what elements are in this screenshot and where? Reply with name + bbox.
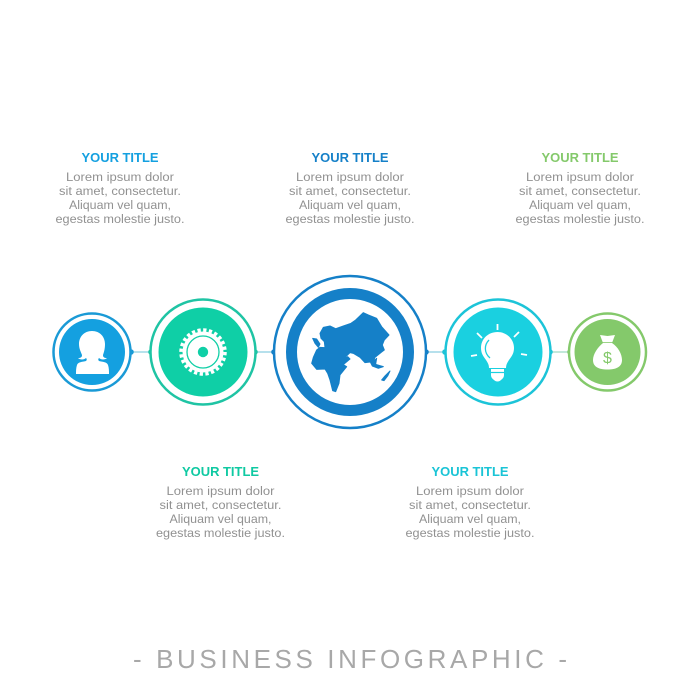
- text block: top right: sit amet, consectetur.: [519, 184, 641, 198]
- text block: top center: Lorem ipsum dolor: [296, 170, 404, 184]
- text block: bottom left: YOUR TITLE: [182, 464, 259, 479]
- text block: top left: Aliquam vel quam,: [69, 198, 171, 212]
- connector: person to gear: [128, 349, 154, 355]
- icon: light bulb: [471, 324, 527, 382]
- text block: bottom right: Aliquam vel quam,: [419, 512, 521, 526]
- text block: bottom right: [406, 464, 534, 540]
- text block: top left: [56, 150, 184, 226]
- text block: bottom left: egestas molestie justo.: [156, 526, 285, 540]
- text block: top right: egestas molestie justo.: [516, 212, 644, 226]
- text block: bottom right: sit amet, consectetur.: [409, 498, 531, 512]
- text block: top center: YOUR TITLE: [312, 150, 389, 165]
- circle: person: [54, 314, 130, 390]
- connector: gear to globe: [252, 349, 277, 355]
- text block: bottom left: Aliquam vel quam,: [170, 512, 272, 526]
- text block: bottom right: Lorem ipsum dolor: [416, 484, 524, 498]
- text block: bottom left: [156, 464, 285, 540]
- text block: top right: Lorem ipsum dolor: [526, 170, 634, 184]
- text block: top center: sit amet, consectetur.: [289, 184, 411, 198]
- icon: gear: [181, 330, 225, 374]
- icon: person: [76, 331, 109, 374]
- text block: top left: Lorem ipsum dolor: [66, 170, 174, 184]
- icon: money bag: $: [603, 350, 612, 367]
- circle: light bulb: [446, 300, 550, 404]
- connector: globe to bulb: [423, 349, 448, 355]
- text block: top left: YOUR TITLE: [82, 150, 159, 165]
- circle: globe: [274, 276, 426, 428]
- text block: top center: [286, 150, 414, 226]
- text block: top center: egestas molestie justo.: [286, 212, 414, 226]
- text block: bottom left: Lorem ipsum dolor: [166, 484, 274, 498]
- text block: bottom right: YOUR TITLE: [432, 464, 509, 479]
- circle: money bag: [569, 314, 646, 390]
- text block: top left: egestas molestie justo.: [56, 212, 184, 226]
- text block: top right: Aliquam vel quam,: [529, 198, 631, 212]
- text block: top center: Aliquam vel quam,: [299, 198, 401, 212]
- text block: bottom left: sit amet, consectetur.: [160, 498, 282, 512]
- connector: bulb to money bag: [547, 349, 573, 355]
- footer title: - BUSINESS INFOGRAPHIC -: [133, 644, 567, 674]
- circle: gear: [150, 300, 256, 404]
- icon: world map: [312, 313, 390, 392]
- text block: top left: sit amet, consectetur.: [59, 184, 181, 198]
- text block: top right: [516, 150, 644, 226]
- text block: top right: YOUR TITLE: [542, 150, 619, 165]
- text block: bottom right: egestas molestie justo.: [406, 526, 534, 540]
